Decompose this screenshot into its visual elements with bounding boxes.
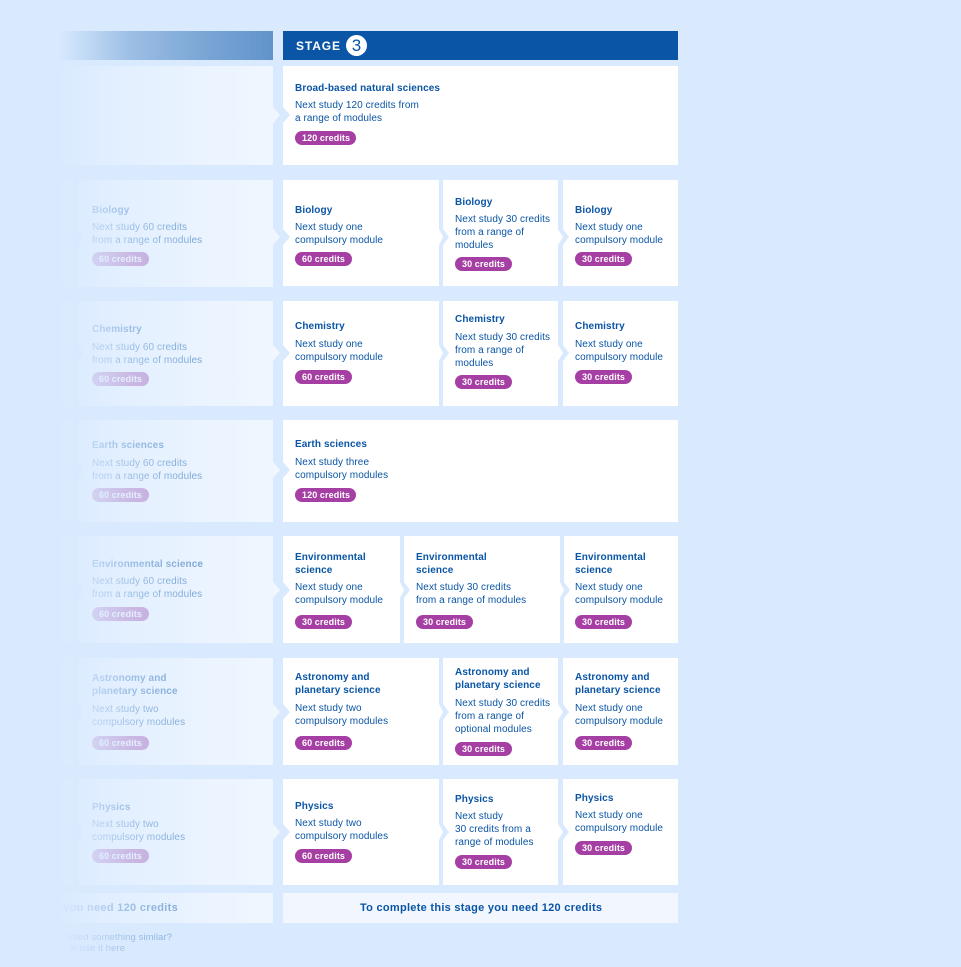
- panel: chemistry stage 3 part 3: 30 credits: [582, 372, 625, 382]
- panel: biology stage 3 part 3: [563, 180, 678, 286]
- panel: chemistry stage 3 part 1: 60 credits: [302, 372, 345, 382]
- panel: biology stage 3 part 2: from a range of: [455, 227, 524, 238]
- panel: environmental science stage 3 part 3: Next study one: [575, 582, 643, 593]
- panel: environmental science stage 3 part 1: 30 credits: [302, 617, 345, 627]
- panel: physics stage 3 part 2: range of modules: [455, 837, 534, 848]
- panel: chemistry stage 3 part 2: from a range of: [455, 345, 524, 356]
- panel: chemistry stage 3 part 2: [443, 301, 558, 406]
- panel: physics stage 3 part 2: Physics: [455, 794, 494, 805]
- left footer bar: you need 120 credits: [63, 902, 178, 914]
- panel: environmental science stage 3 part 2: Next study 30 credits: [416, 582, 511, 593]
- left panel: environmental science: Environmental science: [92, 559, 203, 570]
- panel: astronomy stage 3 part 3: 30 credits: [582, 738, 625, 748]
- panel: physics stage 3 part 1: 60 credits: [302, 851, 345, 861]
- panel: environmental science stage 3 part 2: science: [416, 565, 453, 576]
- panel: biology stage 3 part 1: Next study one: [295, 222, 363, 233]
- left footnote: studied something similar?: [57, 932, 172, 943]
- left panel: chemistry: from a range of modules: [92, 355, 202, 366]
- panel: environmental science stage 3 part 2: Environmental: [416, 552, 487, 563]
- left column partial strips: [0, 0, 74, 967]
- panel: broad-based natural sciences: Broad-based natural sciences: [295, 83, 440, 94]
- left panel: physics: Physics: [92, 802, 131, 813]
- panel: astronomy stage 3 part 1: [283, 658, 439, 765]
- panel: physics stage 3 part 3: 30 credits: [582, 843, 625, 853]
- panel: physics stage 3 part 2: [443, 779, 558, 885]
- left panel: physics: 60 credits: [99, 851, 142, 861]
- left panel: chemistry: 60 credits: [99, 374, 142, 384]
- panel: physics stage 3 part 1: Physics: [295, 801, 334, 812]
- panel: environmental science stage 3 part 1: science: [295, 565, 332, 576]
- left panel: chemistry: Next study 60 credits: [92, 342, 187, 353]
- left panel: earth sciences: Earth sciences: [92, 440, 164, 451]
- stage label: STAGE: [296, 39, 341, 53]
- panel: chemistry stage 3 part 2: Next study 30 credits: [455, 332, 550, 343]
- panel: broad-based natural sciences: a range of modules: [295, 113, 382, 124]
- panel: biology stage 3 part 1: compulsory module: [295, 235, 383, 246]
- left panel: physics: Next study two: [92, 819, 159, 830]
- left panel: earth sciences: 60 credits: [99, 490, 142, 500]
- left panel: physics: [78, 779, 273, 885]
- panel: biology stage 3 part 1: [283, 180, 439, 286]
- panel: biology stage 3 part 2: 30 credits: [462, 259, 505, 269]
- panel: earth sciences stage 3: Next study three: [295, 457, 369, 468]
- panel: biology stage 3 part 3: 30 credits: [582, 254, 625, 264]
- panel: environmental science stage 3 part 3: compulsory module: [575, 595, 663, 606]
- panel: chemistry stage 3 part 3: compulsory module: [575, 352, 663, 363]
- panel: physics stage 3 part 2: 30 credits: [462, 857, 505, 867]
- panel: physics stage 3 part 3: [563, 779, 678, 885]
- panel: chemistry stage 3 part 2: 30 credits: [462, 377, 505, 387]
- panel: biology stage 3 part 3: Next study one: [575, 222, 643, 233]
- panel: astronomy stage 3 part 3: [563, 658, 678, 765]
- panel: biology stage 3 part 3: Biology: [575, 205, 612, 216]
- panel: astronomy stage 3 part 2: planetary science: [455, 680, 541, 691]
- right footer bar: [283, 893, 678, 923]
- left chevrons: [0, 0, 100, 967]
- panel: chemistry stage 3 part 2: modules: [455, 358, 493, 369]
- left panel: biology: 60 credits: [99, 254, 142, 264]
- panel: biology stage 3 part 1: 60 credits: [302, 254, 345, 264]
- panel: biology stage 3 part 3: compulsory module: [575, 235, 663, 246]
- panel: biology stage 3 part 2: Biology: [455, 197, 492, 208]
- left panel: environmental science: 60 credits: [99, 609, 142, 619]
- panel: chemistry stage 3 part 3: [563, 301, 678, 406]
- panel: physics stage 3 part 3: Physics: [575, 793, 614, 804]
- fade overlay on left column: [0, 0, 274, 967]
- panel: astronomy stage 3 part 3: compulsory module: [575, 716, 663, 727]
- panel: chemistry stage 3 part 1: Next study one: [295, 339, 363, 350]
- left panel: astronomy: [78, 658, 273, 765]
- panel: physics stage 3 part 1: Next study two: [295, 818, 362, 829]
- panel: environmental science stage 3 part 1: compulsory module: [295, 595, 383, 606]
- panel: biology stage 3 part 2: [443, 180, 558, 286]
- panel: astronomy stage 3 part 3: planetary science: [575, 685, 661, 696]
- panel: environmental science stage 3 part 3: [564, 536, 678, 643]
- panel: astronomy stage 3 part 2: optional modules: [455, 724, 532, 735]
- panel: physics stage 3 part 1: compulsory modules: [295, 831, 388, 842]
- panel: biology stage 3 part 2: Next study 30 credits: [455, 214, 550, 225]
- left panel: environmental science: [78, 536, 273, 643]
- stage header: [283, 31, 678, 60]
- left footnote: able to use it here: [48, 943, 125, 954]
- panel: astronomy stage 3 part 1: Astronomy and: [295, 672, 370, 683]
- panel: environmental science stage 3 part 2: [404, 536, 560, 643]
- panel: physics stage 3 part 2: 30 credits from a: [455, 824, 531, 835]
- panel: environmental science stage 3 part 3: Environmental: [575, 552, 646, 563]
- left panel: earth sciences: from a range of modules: [92, 471, 202, 482]
- left panel: chemistry: Chemistry: [92, 324, 142, 335]
- panel: physics stage 3 part 3: Next study one: [575, 810, 643, 821]
- panel: environmental science stage 3 part 1: Environmental: [295, 552, 366, 563]
- left panel: astronomy: 60 credits: [99, 738, 142, 748]
- left column header bar: [40, 31, 273, 60]
- panel: broad-based natural sciences: Next study 120 credits from: [295, 100, 419, 111]
- panel: earth sciences stage 3: 120 credits: [302, 490, 350, 500]
- left panel: physics: compulsory modules: [92, 832, 185, 843]
- panel: astronomy stage 3 part 2: Next study 30 credits: [455, 698, 550, 709]
- left panel: earth sciences: Next study 60 credits: [92, 458, 187, 469]
- left panel: astronomy: Next study two: [92, 704, 159, 715]
- stage number badge: 3: [352, 36, 361, 55]
- panel: earth sciences stage 3: Earth sciences: [295, 439, 367, 450]
- panel: environmental science stage 3 part 2: from a range of modules: [416, 595, 526, 606]
- panel: astronomy stage 3 part 2: from a range of: [455, 711, 524, 722]
- panel: chemistry stage 3 part 1: Chemistry: [295, 321, 345, 332]
- panel: biology stage 3 part 2: modules: [455, 240, 493, 251]
- left panel: earth sciences: [78, 420, 273, 522]
- left panel: astronomy: Astronomy and: [92, 673, 167, 684]
- panel: earth sciences stage 3: [283, 420, 678, 522]
- panel: chemistry stage 3 part 2: Chemistry: [455, 314, 505, 325]
- panel: broad-based natural sciences: [283, 66, 678, 165]
- right footer bar: To complete this stage you need 120 credits: [360, 902, 602, 914]
- left panel: environmental science: Next study 60 credits: [92, 576, 187, 587]
- left panel: environmental science: from a range of modules: [92, 589, 202, 600]
- left panel: astronomy: compulsory modules: [92, 717, 185, 728]
- panel: environmental science stage 3 part 1: Next study one: [295, 582, 363, 593]
- panel: chemistry stage 3 part 1: [283, 301, 439, 406]
- panel: environmental science stage 3 part 3: science: [575, 565, 612, 576]
- panel: astronomy stage 3 part 1: planetary science: [295, 685, 381, 696]
- panel: physics stage 3 part 3: compulsory module: [575, 823, 663, 834]
- panel: environmental science stage 3 part 3: 30 credits: [582, 617, 625, 627]
- panel: astronomy stage 3 part 2: 30 credits: [462, 744, 505, 754]
- panel: astronomy stage 3 part 2: [443, 658, 558, 765]
- panel: environmental science stage 3 part 1: [283, 536, 400, 643]
- left panel: biology: [78, 180, 273, 287]
- panel: chemistry stage 3 part 3: Chemistry: [575, 321, 625, 332]
- left footer bar: [40, 893, 273, 923]
- panel: environmental science stage 3 part 2: 30 credits: [423, 617, 466, 627]
- panel: astronomy stage 3 part 1: Next study two: [295, 703, 362, 714]
- left panel: biology: Biology: [92, 205, 129, 216]
- panel: chemistry stage 3 part 3: Next study one: [575, 339, 643, 350]
- left column panel: broad-based placeholder: [40, 66, 273, 165]
- left panel: biology: Next study 60 credits: [92, 222, 187, 233]
- panel: physics stage 3 part 1: [283, 779, 439, 885]
- panel: earth sciences stage 3: compulsory modules: [295, 470, 388, 481]
- left panel: biology: from a range of modules: [92, 235, 202, 246]
- panel: biology stage 3 part 1: Biology: [295, 205, 332, 216]
- panel: astronomy stage 3 part 2: Astronomy and: [455, 667, 530, 678]
- panel: astronomy stage 3 part 3: Next study one: [575, 703, 643, 714]
- panel: astronomy stage 3 part 1: 60 credits: [302, 738, 345, 748]
- panel: astronomy stage 3 part 3: Astronomy and: [575, 672, 650, 683]
- panel: astronomy stage 3 part 1: compulsory modules: [295, 716, 388, 727]
- panel: chemistry stage 3 part 1: compulsory module: [295, 352, 383, 363]
- left panel: chemistry: [78, 301, 273, 406]
- left footnote: [48, 932, 172, 954]
- panel: broad-based natural sciences: 120 credits: [302, 133, 350, 143]
- left panel: astronomy: planetary science: [92, 686, 178, 697]
- panel: physics stage 3 part 2: Next study: [455, 811, 503, 822]
- stage number badge: [346, 35, 367, 56]
